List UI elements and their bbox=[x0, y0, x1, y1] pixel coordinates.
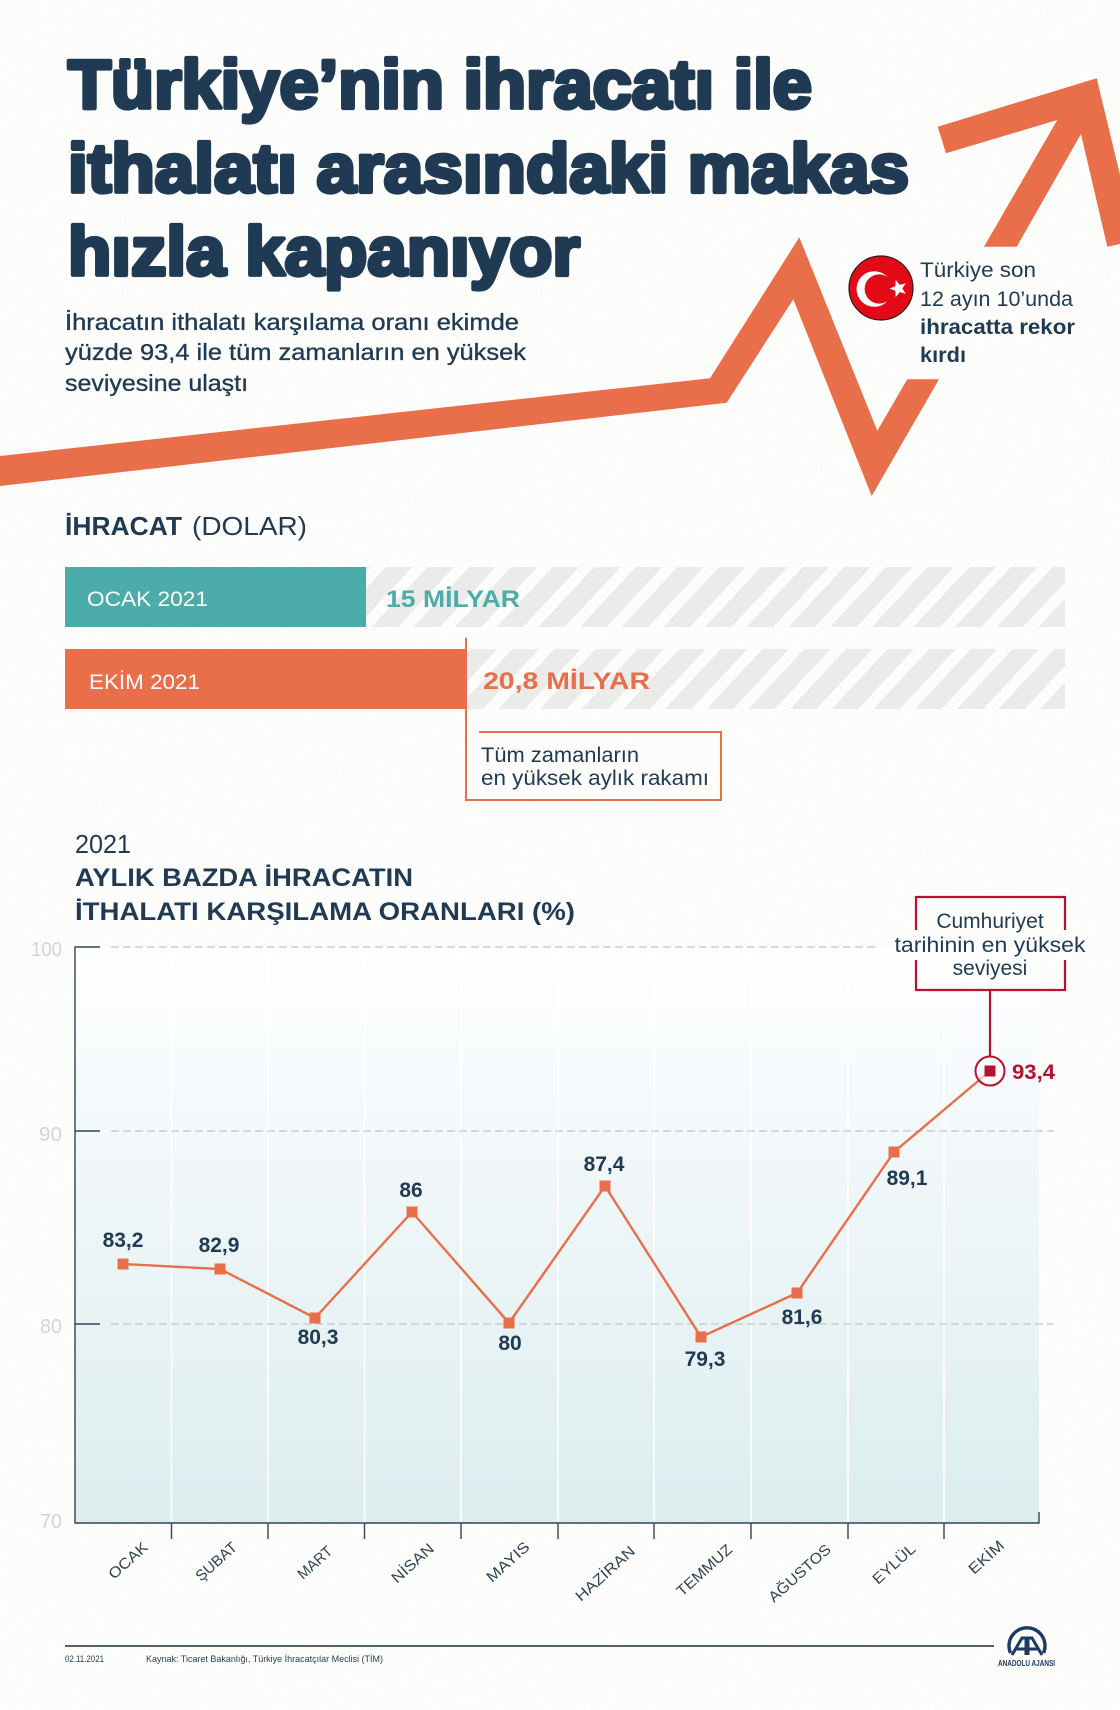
heading: export: (DOLAR) bbox=[192, 511, 307, 541]
record note: kırdı bbox=[920, 344, 966, 367]
month labels: EYLÜL bbox=[869, 1540, 919, 1588]
value labels: 82,9 bbox=[199, 1234, 239, 1257]
title: ithalatı arasındaki makas bbox=[68, 130, 909, 207]
heading: chart bbox=[75, 829, 575, 926]
record note: 12 ayın 10’unda bbox=[920, 288, 1073, 311]
arrow: zigzag line bbox=[0, 237, 939, 496]
month labels: ŞUBAT bbox=[192, 1539, 241, 1585]
chart area bbox=[75, 947, 1039, 1523]
callout: highest in republic history: seviyesi bbox=[953, 957, 1027, 980]
bar: January 2021: OCAK 2021 bbox=[87, 588, 208, 611]
month labels: MART bbox=[294, 1543, 336, 1583]
value labels: 89,1 bbox=[887, 1167, 928, 1190]
subtitle text bbox=[65, 309, 527, 396]
value labels bbox=[103, 1153, 928, 1371]
line chart bbox=[31, 939, 1055, 1606]
peak marker: 93,4 bbox=[1012, 1061, 1055, 1084]
footer: 02.11.2021 bbox=[65, 1654, 104, 1665]
title bbox=[68, 46, 909, 290]
title: Türkiye’nin ihracatı ile bbox=[68, 46, 812, 123]
month labels: OCAK bbox=[105, 1539, 152, 1583]
month labels: NİSAN bbox=[388, 1539, 438, 1587]
bar: October 2021: 20,8 MİLYAR bbox=[483, 668, 650, 695]
logo: Anadolu Ajansı bbox=[998, 1628, 1055, 1668]
callout: highest in republic history: tarihinin en yüksek bbox=[894, 934, 1086, 957]
bar: October 2021: EKİM 2021 bbox=[89, 671, 200, 694]
subtitle text: İhracatın ithalatı karşılama oranı ekimde bbox=[65, 309, 519, 335]
record note bbox=[920, 259, 1075, 367]
callout: highest in republic history bbox=[894, 897, 1086, 1056]
footer bbox=[65, 1646, 994, 1665]
month labels: EKİM bbox=[965, 1536, 1008, 1578]
value labels: 80,3 bbox=[298, 1326, 338, 1349]
peak marker bbox=[976, 1056, 1055, 1086]
subtitle text: yüzde 93,4 ile tüm zamanların en yüksek bbox=[65, 339, 527, 365]
value labels: 83,2 bbox=[103, 1229, 143, 1252]
month labels bbox=[105, 1536, 1008, 1606]
callout: highest in republic history: Cumhuriyet bbox=[936, 910, 1044, 933]
month labels: HAZİRAN bbox=[572, 1542, 639, 1605]
month labels: TEMMUZ bbox=[673, 1541, 736, 1600]
y axis labels: 100 bbox=[31, 939, 62, 961]
value labels: 81,6 bbox=[782, 1306, 822, 1329]
value labels: 80 bbox=[498, 1332, 522, 1355]
bar: January 2021 bbox=[65, 567, 1065, 627]
title: hızla kapanıyor bbox=[68, 213, 580, 290]
callout: all-time monthly high: en yüksek aylık rakamı bbox=[481, 767, 709, 790]
subtitle text: seviyesine ulaştı bbox=[65, 370, 248, 396]
footer: Kaynak: Ticaret Bakanlığı, Türkiye İhracatçılar Meclisi (TİM) bbox=[146, 1654, 383, 1665]
value labels: 86 bbox=[399, 1179, 423, 1202]
heading: export: İHRACAT bbox=[65, 511, 182, 541]
y axis labels: 70 bbox=[40, 1511, 62, 1533]
data markers bbox=[118, 1146, 900, 1342]
heading: chart: 2021 bbox=[75, 829, 131, 859]
y axis labels bbox=[31, 939, 62, 1533]
callout: all-time monthly high bbox=[466, 638, 721, 800]
y axis labels: 80 bbox=[40, 1316, 62, 1338]
trend arrow bbox=[0, 78, 1120, 496]
record note: Türkiye son bbox=[920, 259, 1036, 282]
logo: Anadolu Ajansı: ANADOLU AJANSI bbox=[998, 1658, 1055, 1668]
arrow: head bbox=[938, 78, 1120, 247]
bar: January 2021: 15 MİLYAR bbox=[386, 586, 520, 613]
heading: chart: İTHALATI KARŞILAMA ORANLARI (%) bbox=[75, 898, 575, 926]
y axis labels: 90 bbox=[39, 1124, 62, 1146]
icon: Turkish flag bbox=[849, 256, 913, 320]
month labels: MAYIS bbox=[483, 1539, 533, 1586]
heading: export bbox=[65, 511, 307, 541]
record note: ihracatta rekor bbox=[920, 316, 1075, 339]
data line bbox=[123, 1071, 990, 1337]
callout: all-time monthly high: Tüm zamanların bbox=[481, 744, 639, 767]
month labels: AĞUSTOS bbox=[765, 1541, 835, 1606]
value labels: 87,4 bbox=[584, 1153, 625, 1176]
value labels: 79,3 bbox=[685, 1348, 725, 1371]
heading: chart: AYLIK BAZDA İHRACATIN bbox=[75, 864, 413, 892]
bar: October 2021 bbox=[65, 649, 1065, 709]
